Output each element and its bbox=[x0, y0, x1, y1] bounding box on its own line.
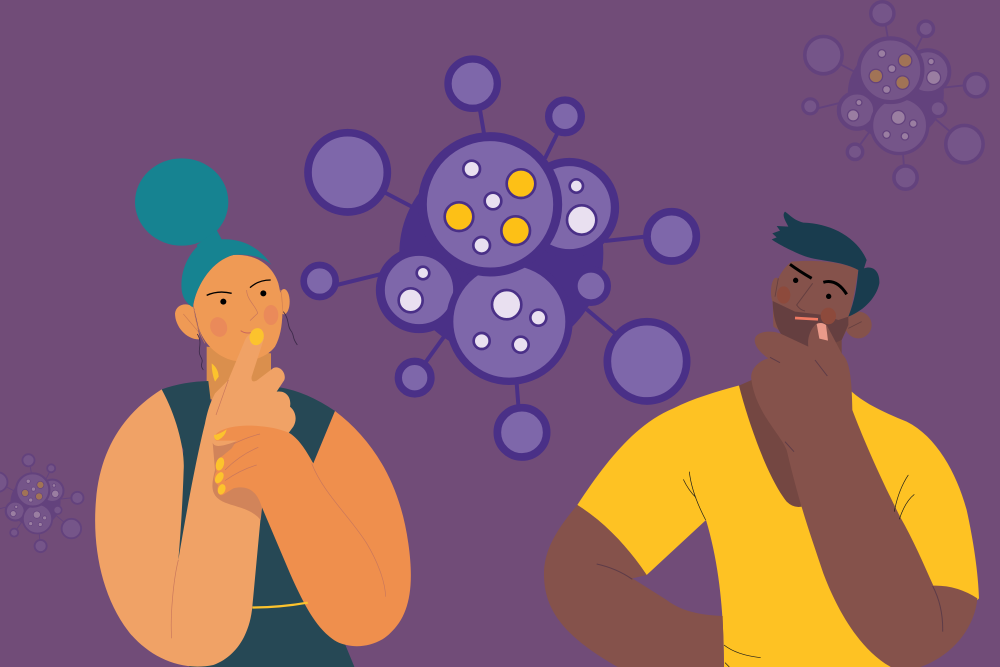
woman: nose bbox=[247, 290, 258, 321]
woman: eyes and brows bbox=[207, 280, 271, 305]
man: shirt fold lines bbox=[683, 472, 914, 667]
woman: ears bbox=[175, 289, 290, 339]
woman: second arm and hand bbox=[214, 411, 411, 646]
man: right ear bbox=[845, 312, 872, 338]
central virus illustration bbox=[304, 59, 696, 457]
woman: face bbox=[193, 255, 282, 361]
woman: lips bbox=[241, 331, 252, 333]
man: face bbox=[773, 261, 858, 350]
man: hair bbox=[772, 212, 879, 317]
man: nose bbox=[797, 283, 813, 311]
man: left arm on hip bbox=[544, 505, 724, 667]
man: eyes and brows bbox=[790, 264, 847, 299]
woman: hair bun bbox=[135, 158, 228, 246]
man: yellow shirt bbox=[577, 386, 979, 667]
man: skin crease lines bbox=[597, 357, 943, 632]
faded virus: top right bbox=[803, 2, 988, 189]
man: raised arm and hand bbox=[751, 323, 977, 667]
faded virus: bottom left bbox=[0, 454, 83, 552]
woman: ear detail lines bbox=[183, 290, 282, 343]
woman: hand shadow bbox=[212, 440, 263, 520]
woman thinking bbox=[95, 158, 411, 667]
woman: yellow nails bbox=[212, 326, 266, 496]
man: chest shadow bbox=[739, 380, 802, 507]
woman: cheeks bbox=[207, 305, 278, 339]
woman: dress bbox=[162, 381, 356, 667]
woman: neck bbox=[207, 347, 271, 403]
woman: belt bbox=[252, 602, 308, 609]
woman: skin crease lines bbox=[171, 380, 386, 638]
man: beard bbox=[773, 301, 848, 352]
woman: hair bbox=[181, 230, 272, 307]
man: fingernail bbox=[817, 323, 828, 341]
woman: loose curls bbox=[197, 312, 297, 370]
man: neck bbox=[810, 340, 842, 367]
man: ear and temple lines bbox=[775, 278, 862, 328]
man: cheeks bbox=[777, 286, 836, 324]
man thinking bbox=[544, 212, 979, 667]
man: left ear bbox=[771, 278, 781, 306]
man: mouth bbox=[795, 318, 818, 319]
woman: raised arm and finger bbox=[95, 333, 296, 667]
